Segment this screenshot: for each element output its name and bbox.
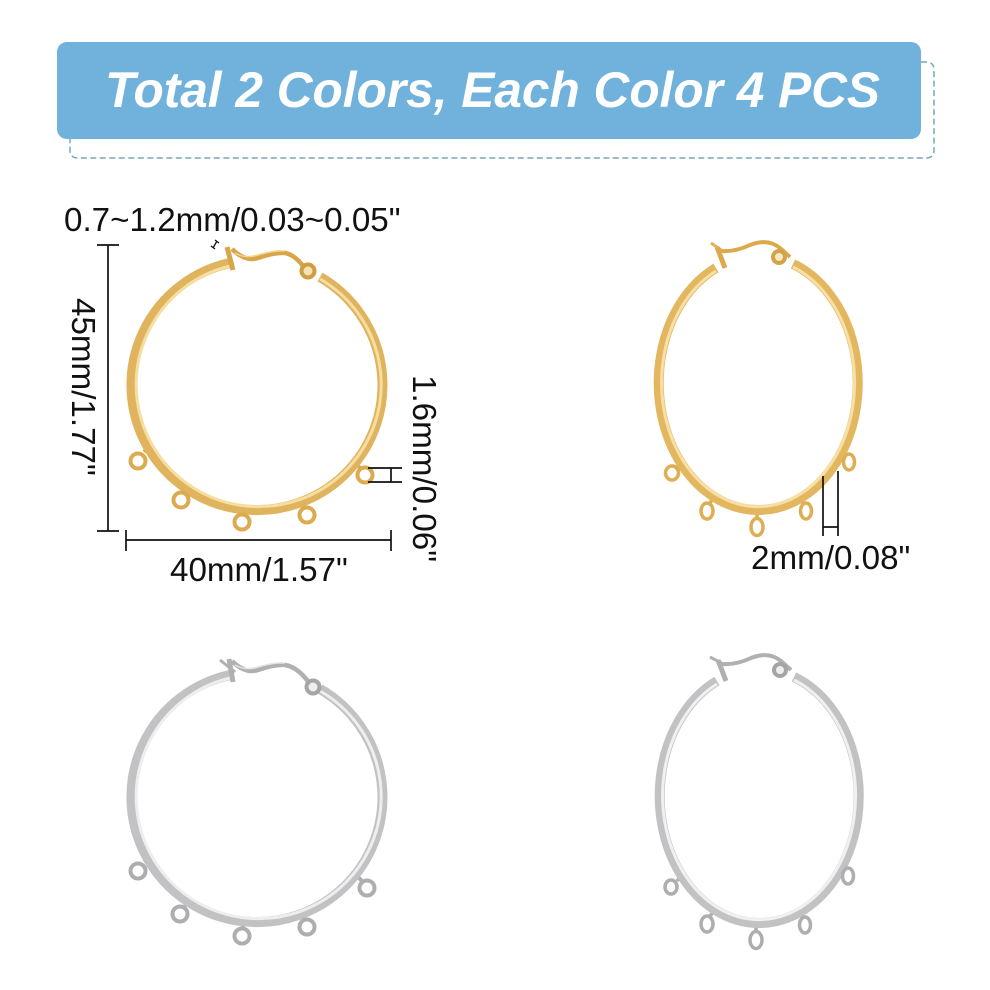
label: tube thickness: 2mm/0.08" bbox=[751, 540, 910, 577]
label: wire thickness: 0.7~1.2mm/0.03~0.05" bbox=[64, 202, 401, 239]
banner bbox=[57, 42, 921, 139]
label: height: 45mm/1.77" bbox=[64, 298, 101, 476]
label: width: 40mm/1.57" bbox=[170, 552, 348, 589]
gold hoop side view bbox=[659, 242, 858, 536]
gold hoop front view bbox=[130, 247, 382, 530]
title: Total 2 Colors, Each Color 4 PCS bbox=[105, 62, 880, 118]
label: loop size: 1.6mm/0.06" bbox=[405, 375, 442, 562]
silver hoop front view bbox=[130, 659, 382, 944]
dimension lines bbox=[97, 240, 838, 551]
silver hoop side view bbox=[660, 655, 859, 948]
banner outline bbox=[70, 62, 934, 158]
